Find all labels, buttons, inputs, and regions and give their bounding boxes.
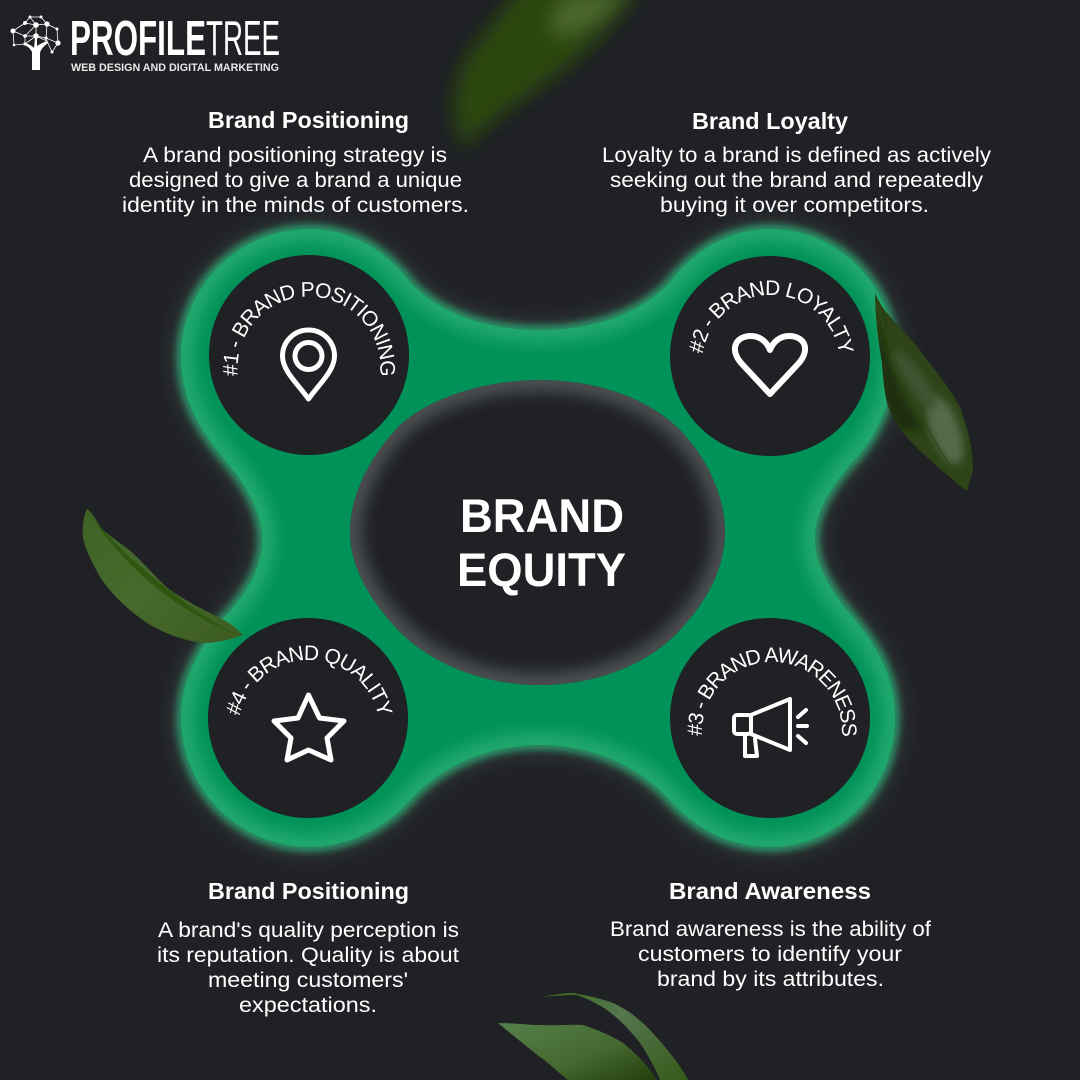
panel: text top left	[122, 107, 469, 217]
body text: Loyalty to a brand is defined as actively	[602, 144, 992, 167]
icon: megaphone	[734, 699, 807, 756]
leaf: top blurred	[454, 0, 640, 148]
curved label: #2 - BRAND LOYALTY	[689, 280, 854, 354]
body text: A brand positioning strategy is	[143, 144, 447, 167]
body text: buying it over competitors.	[660, 194, 929, 217]
body text	[602, 144, 992, 217]
body text	[157, 919, 459, 1017]
panel: text bottom left	[157, 878, 459, 1017]
heading: Brand Awareness	[669, 878, 871, 904]
body text: Brand awareness is the ability of	[610, 918, 931, 941]
badge: #4 brand quality	[208, 618, 408, 818]
icon: heart	[735, 336, 805, 394]
body text: A brand's quality perception is	[158, 919, 459, 942]
wordmark: tree: TREE	[206, 12, 280, 66]
heading: Brand Positioning	[208, 878, 409, 904]
curved label: #4 - BRAND QUALITY	[226, 646, 393, 715]
leaf: left	[83, 509, 243, 643]
title: Brand Equity: BRAND	[460, 489, 624, 542]
leaf: bottom pair	[498, 993, 688, 1080]
body text: expectations.	[239, 994, 377, 1017]
curved label: #1 - BRAND POSITIONING	[223, 282, 396, 376]
center hole	[350, 380, 725, 685]
curved label: #3 - BRAND AWARENESS	[688, 648, 857, 736]
body text: customers to identify your	[638, 943, 902, 966]
badge: #3 brand awareness	[670, 618, 870, 818]
icon: network tree	[10, 16, 61, 70]
diagram: green blob	[181, 229, 895, 847]
body text: its reputation. Quality is about	[157, 944, 459, 967]
heading: Brand Loyalty	[692, 108, 848, 134]
badge: #2 brand loyalty	[670, 256, 870, 456]
body text: identity in the minds of customers.	[122, 194, 469, 217]
body text	[122, 144, 469, 217]
heading: Brand Positioning	[208, 107, 409, 133]
panel: text top right	[602, 108, 992, 217]
wordmark: PROFILE	[70, 12, 206, 66]
body text	[610, 918, 931, 991]
title: Brand Equity	[457, 489, 626, 596]
leaf: right	[875, 293, 973, 491]
logo: ProfileTree	[10, 12, 280, 74]
badge: #1 brand positioning	[209, 255, 409, 455]
body text: seeking out the brand and repeatedly	[610, 169, 984, 192]
tagline: WEB DESIGN AND DIGITAL MARKETING	[71, 62, 279, 74]
body text: brand by its attributes.	[657, 968, 884, 991]
title: Brand Equity: EQUITY	[457, 543, 626, 596]
panel: text bottom right	[610, 878, 931, 991]
body text: designed to give a brand a unique	[129, 169, 462, 192]
icon: map pin	[282, 330, 334, 399]
icon: star	[274, 695, 344, 760]
body text: meeting customers'	[208, 969, 408, 992]
